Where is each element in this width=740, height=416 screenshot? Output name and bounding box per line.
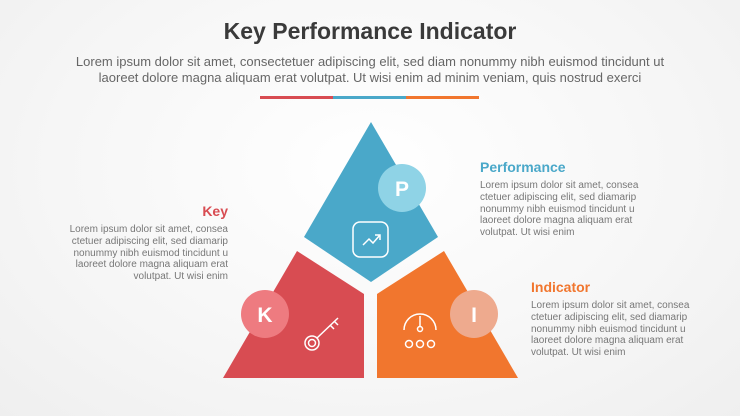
text: performance: ctetuer adipiscing elit, sed diamarip [480, 192, 636, 203]
title: Key Performance Indicator [224, 18, 516, 44]
text: indicator: volutpat. Ut wisi enim [531, 347, 625, 358]
text: key: Key [202, 203, 228, 219]
segment: indicator [377, 251, 518, 378]
text: key: volutpat. Ut wisi enim [134, 271, 228, 282]
circle K: K [257, 304, 273, 327]
text: performance [480, 159, 638, 238]
circle P: P [395, 178, 409, 201]
text: indicator: Lorem ipsum dolor sit amet, consea [531, 300, 689, 311]
subtitle [76, 54, 664, 84]
text: performance: Performance [480, 159, 566, 175]
circle P [378, 164, 426, 212]
segment: key [223, 251, 364, 378]
text: performance: volutpat. Ut wisi enim [480, 227, 574, 238]
icon: gauge [404, 314, 436, 348]
subtitle: Lorem ipsum dolor sit amet, consectetuer adipiscing elit, sed diam nonummy nibh euismod tincidunt ut [76, 54, 664, 69]
text: key [70, 203, 228, 282]
color bar [260, 96, 479, 99]
circle I [450, 290, 498, 338]
subtitle: laoreet dolore magna aliquam erat volutpat. Ut wisi enim ad minim veniam, quis nostrud exerci [99, 70, 641, 84]
text: performance: laoreet dolore magna aliquam erat [480, 215, 632, 226]
text: indicator: laoreet dolore magna aliquam erat [531, 335, 683, 346]
icon: chart [353, 222, 388, 257]
text: indicator: ctetuer adipiscing elit, sed diamarip [531, 312, 687, 323]
text: indicator: Indicator [531, 279, 590, 295]
segment: performance [304, 122, 438, 282]
text: performance: nonummy nibh euismod tincidunt u [480, 204, 635, 215]
text: key: nonummy nibh euismod tincidunt u [73, 248, 228, 259]
text: performance: Lorem ipsum dolor sit amet, consea [480, 180, 638, 191]
text: indicator: nonummy nibh euismod tincidunt u [531, 324, 686, 335]
text: key: Lorem ipsum dolor sit amet, consea [70, 224, 228, 235]
text: key: laoreet dolore magna aliquam erat [76, 259, 228, 270]
text: key: ctetuer adipiscing elit, sed diamarip [72, 236, 228, 247]
circle I: I [471, 304, 477, 327]
icon: key [305, 318, 338, 350]
text: indicator [531, 279, 690, 358]
circle K [241, 290, 289, 338]
